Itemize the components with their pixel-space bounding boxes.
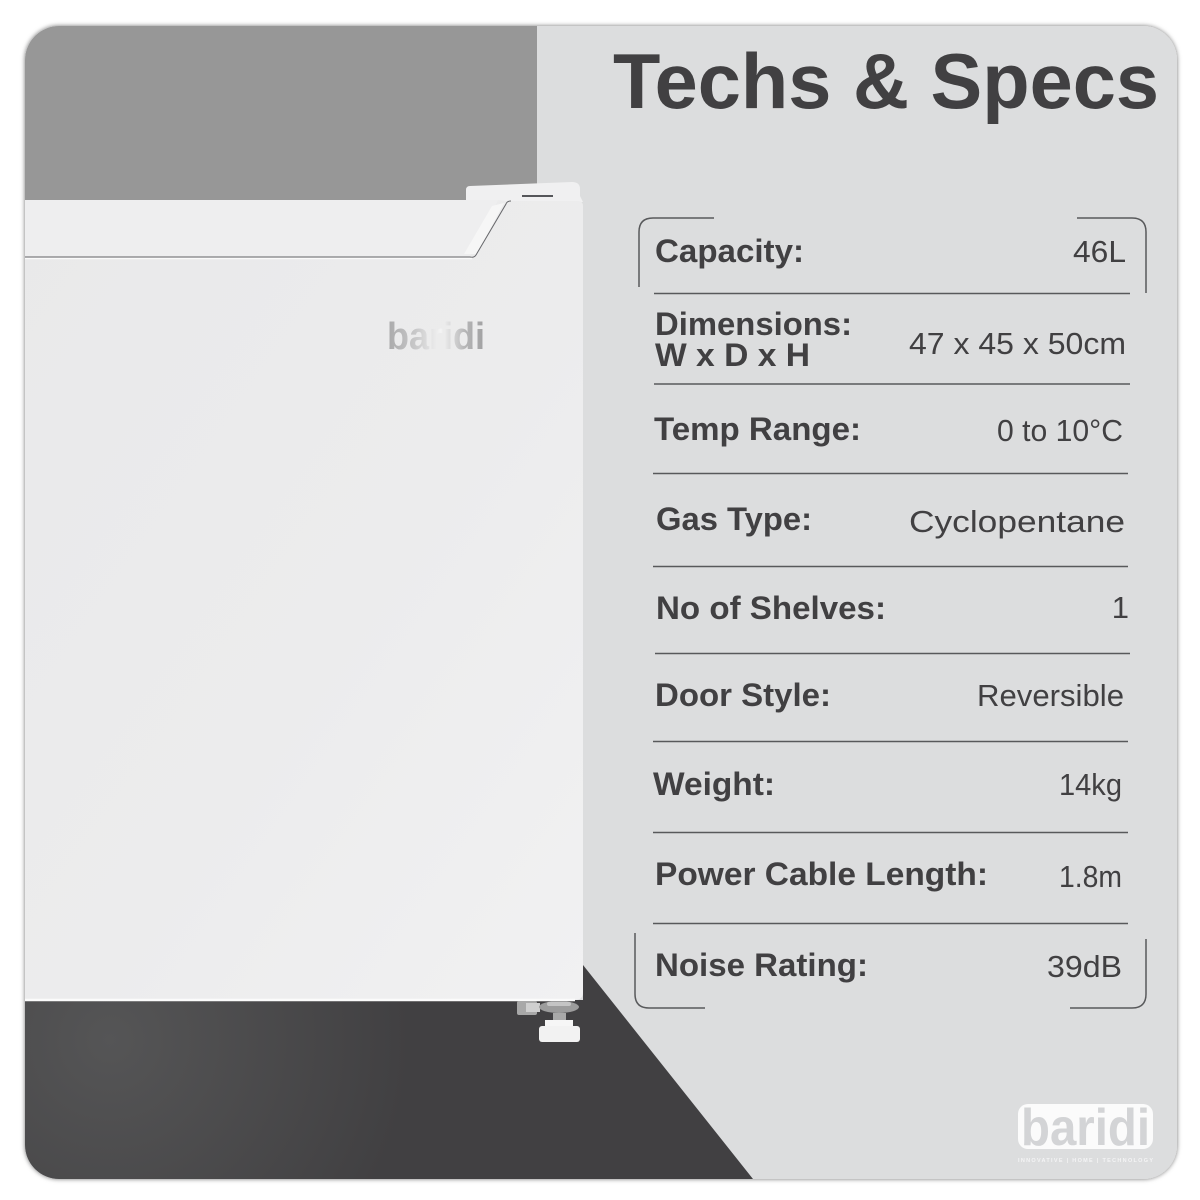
fridge door body	[25, 200, 583, 1000]
row: temp range	[654, 411, 1123, 448]
row: weight: 14kg	[1059, 767, 1122, 802]
row: shelves: 1	[1112, 590, 1129, 625]
row: noise: 39dB	[1047, 949, 1122, 984]
row dividers	[653, 294, 1130, 924]
fridge lid seam	[25, 201, 511, 257]
row: capacity: 46L	[1073, 234, 1126, 269]
row: weight: Weight:	[653, 766, 775, 802]
row: shelves	[656, 590, 1129, 626]
bottom bracket	[635, 933, 1146, 1008]
brand tagline: INNOVATIVE | HOME | TECHNOLOGY	[1018, 1158, 1153, 1164]
product: white mini fridge	[25, 182, 583, 1042]
row: dimensions: W x D x H	[655, 337, 810, 373]
row: gas type: Gas Type:	[656, 501, 812, 537]
fridge adjustable foot	[517, 1001, 580, 1042]
top bracket	[639, 218, 1146, 293]
row: capacity	[655, 233, 1126, 269]
fridge badge logo: baridi	[387, 316, 485, 358]
row: door style: Door Style:	[655, 677, 831, 713]
fridge hinge	[466, 182, 583, 202]
row: door style: Reversible	[977, 678, 1124, 713]
brand logo: baridi	[1021, 1099, 1150, 1157]
row: power cable	[655, 856, 1122, 894]
panel: backdrop blocks	[25, 26, 753, 1179]
row: temp range: Temp Range:	[654, 411, 861, 447]
fridge top lid panel	[25, 200, 498, 256]
row: noise: Noise Rating:	[655, 947, 868, 983]
row: capacity: Capacity:	[655, 233, 804, 269]
fridge door bottom edge	[25, 999, 575, 1001]
specs table	[635, 218, 1146, 1008]
row: gas type: Cyclopentane	[909, 504, 1125, 539]
row: door style	[655, 677, 1124, 713]
row: dimensions: Dimensions:	[655, 306, 852, 342]
row: power cable: 1.8m	[1059, 859, 1122, 894]
row: shelves: No of Shelves:	[656, 590, 886, 626]
row: power cable: Power Cable Length:	[655, 856, 988, 892]
title: Techs & Specs	[613, 37, 1159, 125]
row: gas type	[656, 501, 1125, 539]
row: dimensions: 47 x 45 x 50cm	[909, 326, 1126, 361]
row: dimensions	[655, 306, 1126, 373]
row: weight	[653, 766, 1122, 802]
row: temp range: 0 to 10°C	[997, 413, 1123, 448]
fridge lid highlight	[464, 203, 504, 254]
row: noise	[655, 947, 1122, 984]
